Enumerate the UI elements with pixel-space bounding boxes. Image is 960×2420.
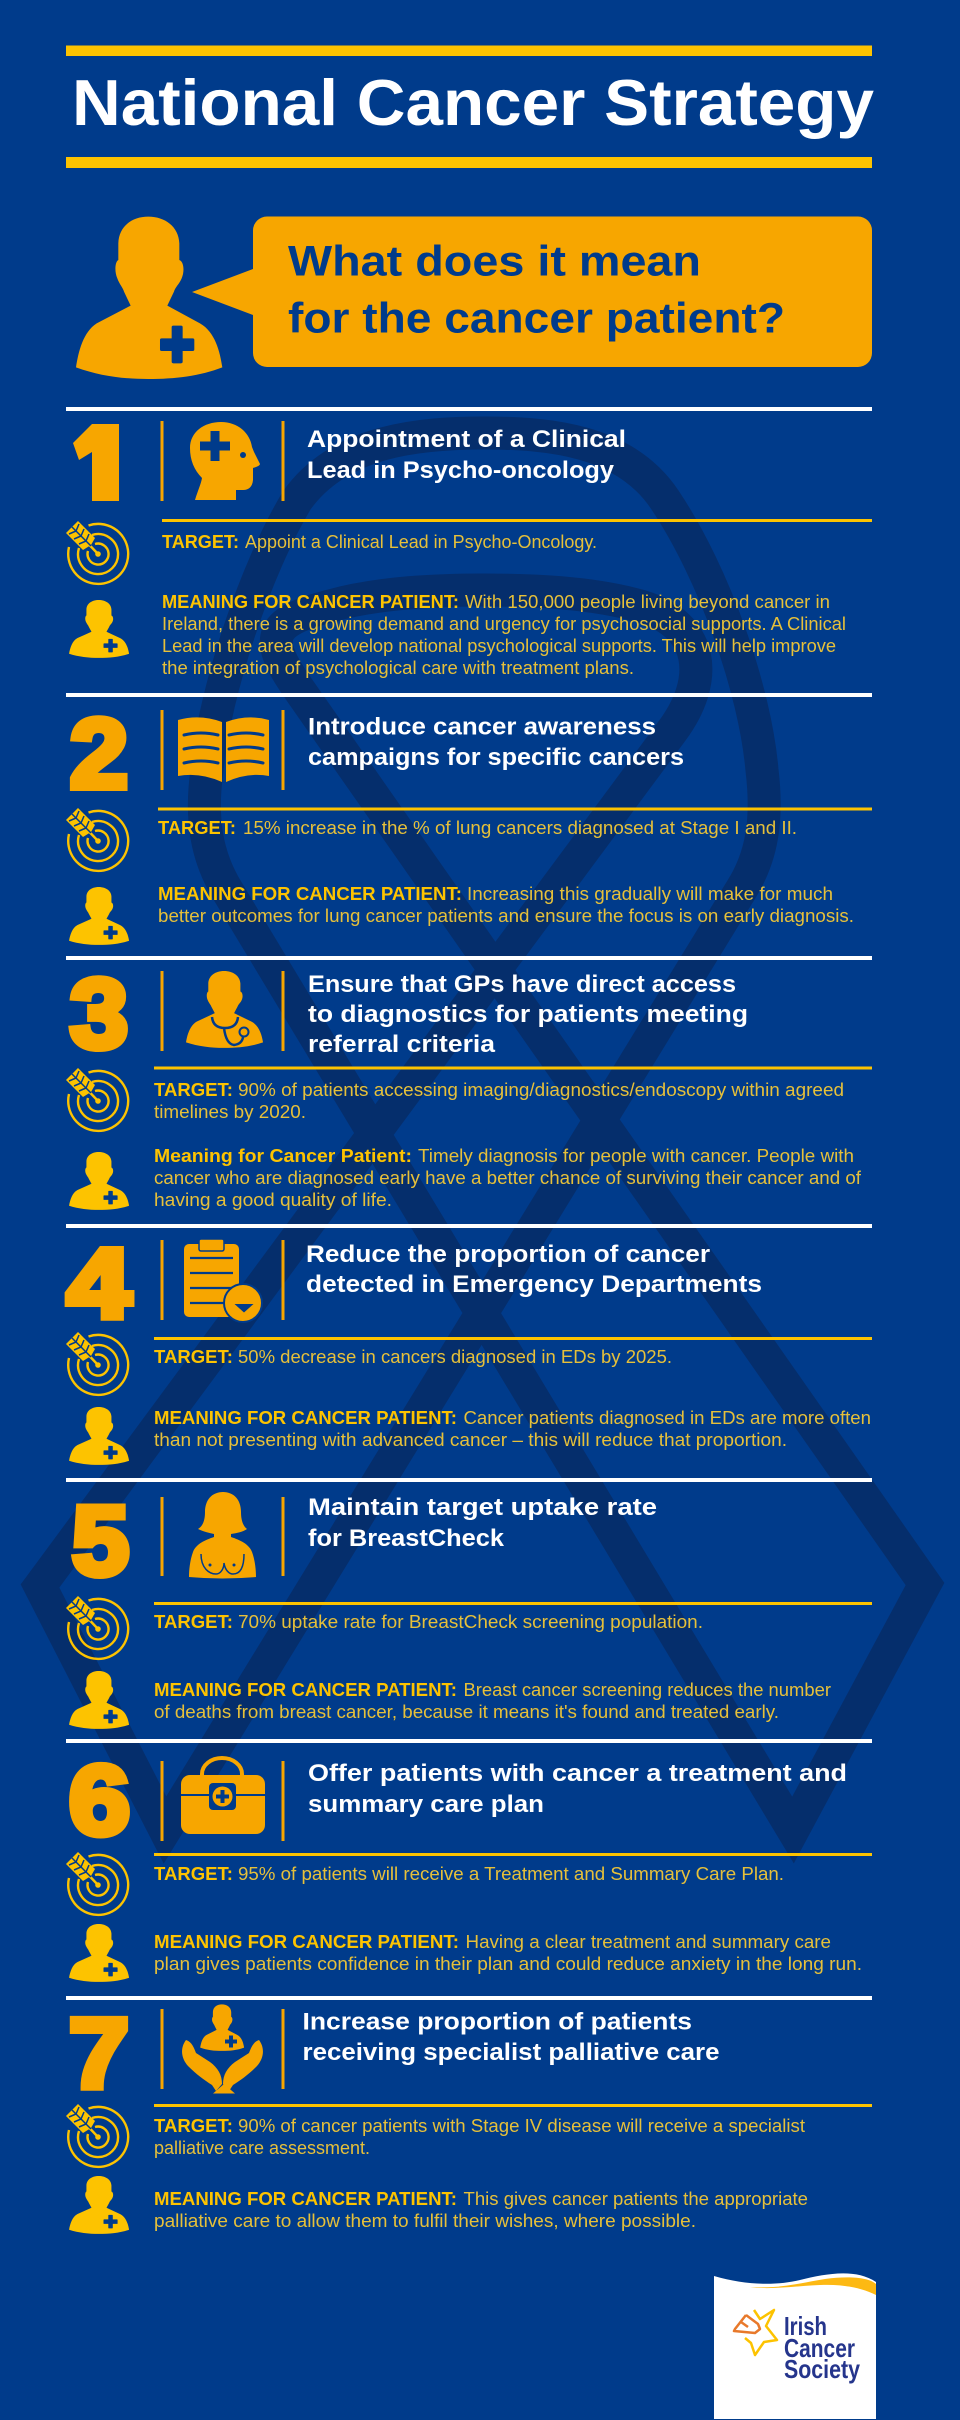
icon: target — [66, 521, 128, 584]
heading: Appointment of a Clinical — [307, 426, 626, 453]
meaning text — [154, 1408, 871, 1450]
icon: target — [66, 1596, 128, 1659]
target text — [154, 2116, 805, 2158]
heading: to diagnostics for patients meeting — [308, 1001, 748, 1028]
icon: target — [66, 1068, 128, 1131]
background awareness ribbon — [40, 433, 925, 1830]
meaning text — [162, 592, 846, 678]
heading — [308, 1494, 657, 1552]
meaning text: MEANING FOR CANCER PATIENT: — [154, 1408, 457, 1428]
meaning text: having a good quality of life. — [154, 1190, 392, 1210]
heading: campaigns for specific cancers — [308, 744, 684, 771]
heading: Increase proportion of patients — [302, 2008, 692, 2036]
meaning text: Timely diagnosis for people with cancer. People with — [418, 1146, 854, 1166]
meaning text: MEANING FOR CANCER PATIENT: — [154, 1680, 457, 1700]
title — [66, 46, 874, 168]
heading — [308, 714, 684, 771]
meaning text: MEANING FOR CANCER PATIENT: — [158, 884, 462, 904]
meaning text: Meaning for Cancer Patient: — [154, 1146, 412, 1166]
number 7: 7 — [69, 1998, 129, 2108]
icon: head with cross — [190, 422, 260, 500]
meaning text: better outcomes for lung cancer patients and ensure the focus is on early diagnosis. — [158, 906, 854, 926]
icon: patient small — [69, 2176, 129, 2234]
panel: item 3 — [66, 956, 872, 1210]
icon: patient — [76, 217, 222, 379]
target text: palliative care assessment. — [154, 2138, 370, 2158]
meaning text: Increasing this gradually will make for much — [467, 884, 833, 904]
icon: patient small — [69, 1152, 129, 1210]
meaning text: MEANING FOR CANCER PATIENT: — [162, 592, 459, 612]
meaning text: With 150,000 people living beyond cancer in — [465, 592, 830, 612]
heading: Offer patients with cancer a treatment and — [308, 1760, 847, 1787]
heading: Introduce cancer awareness — [308, 714, 656, 741]
target text: TARGET: — [154, 1347, 233, 1367]
icon: patient small — [69, 600, 129, 658]
heading: Lead in Psycho-oncology — [307, 457, 614, 484]
icon: target — [66, 2104, 128, 2167]
meaning text — [154, 1932, 862, 1974]
logo daffodil — [734, 2310, 777, 2355]
icon: hands holding patient — [182, 2004, 263, 2094]
logo wordmark: Cancer — [784, 2333, 855, 2363]
meaning text: palliative care to allow them to fulfil their wishes, where possible. — [154, 2211, 696, 2231]
meaning text: Breast cancer screening reduces the number — [464, 1680, 831, 1700]
icon: clipboard — [184, 1239, 262, 1322]
target text: Appoint a Clinical Lead in Psycho-Oncology. — [245, 532, 597, 552]
panel: item 6 — [66, 1739, 872, 1982]
panel: item 5 — [66, 1478, 872, 1729]
meaning text: This gives cancer patients the appropriate — [464, 2189, 808, 2209]
heading: Maintain target uptake rate — [308, 1494, 657, 1521]
logo: Irish Cancer Society — [714, 2273, 876, 2419]
panel: item 4 — [66, 1224, 872, 1465]
icon: patient small — [69, 1924, 129, 1982]
icon: book — [178, 717, 269, 782]
number 1 — [73, 424, 119, 501]
target text: 70% uptake rate for BreastCheck screening population. — [238, 1612, 703, 1632]
meaning text: the integration of psychological care with treatment plans. — [162, 658, 634, 678]
heading — [307, 426, 626, 484]
target text: TARGET: — [162, 532, 239, 552]
meaning text: Having a clear treatment and summary care — [466, 1932, 831, 1952]
speech bubble: What does it mean — [288, 238, 701, 286]
heading: summary care plan — [308, 1791, 544, 1818]
heading: receiving specialist palliative care — [302, 2039, 720, 2066]
target text: 15% increase in the % of lung cancers diagnosed at Stage I and II. — [243, 818, 797, 838]
target text: 90% of patients accessing imaging/diagnostics/endoscopy within agreed — [238, 1080, 844, 1100]
icon: target — [66, 808, 128, 871]
icon: medical bag — [181, 1758, 265, 1834]
panel: item 2 — [66, 693, 872, 945]
target text: TARGET: — [154, 1612, 233, 1632]
target text: TARGET: — [158, 818, 236, 838]
icon: doctor with stethoscope — [186, 971, 263, 1048]
meaning text: MEANING FOR CANCER PATIENT: — [154, 2189, 457, 2209]
icon: patient small — [69, 1671, 129, 1729]
icon: woman — [189, 1492, 256, 1578]
meaning text — [154, 2189, 808, 2231]
heading: Ensure that GPs have direct access — [308, 971, 736, 998]
target text — [154, 1080, 844, 1122]
heading: for BreastCheck — [308, 1525, 504, 1552]
meaning text: Cancer patients diagnosed in EDs are more often — [464, 1408, 871, 1428]
number 6: 6 — [69, 1745, 130, 1855]
number 3: 3 — [70, 958, 128, 1068]
meaning text: than not presenting with advanced cancer – this will reduce that proportion. — [154, 1430, 787, 1450]
target text: 95% of patients will receive a Treatment and Summary Care Plan. — [238, 1864, 784, 1884]
number 4: 4 — [67, 1228, 131, 1338]
icon: target — [66, 1332, 128, 1395]
heading — [306, 1241, 762, 1298]
heading: referral criteria — [308, 1031, 495, 1058]
meaning text: Lead in the area will develop national psychological supports. This will help improve — [162, 636, 836, 656]
heading — [302, 2008, 720, 2066]
target text: 50% decrease in cancers diagnosed in EDs by 2025. — [238, 1347, 672, 1367]
icon: target — [66, 1852, 128, 1915]
icon: patient small — [69, 1407, 129, 1465]
meaning text — [154, 1680, 831, 1722]
heading: detected in Emergency Departments — [306, 1271, 762, 1298]
heading — [308, 971, 748, 1058]
meaning text: MEANING FOR CANCER PATIENT: — [154, 1932, 459, 1952]
target text: TARGET: — [154, 1864, 233, 1884]
target text: TARGET: — [154, 1080, 233, 1100]
heading — [308, 1760, 847, 1818]
logo wordmark: Irish — [784, 2311, 827, 2341]
meaning text: plan gives patients confidence in their plan and could reduce anxiety in the long run. — [154, 1954, 862, 1974]
panel: item 1 — [66, 407, 872, 678]
meaning text — [154, 1146, 862, 1210]
meaning text: of deaths from breast cancer, because it means it's found and treated early. — [154, 1702, 779, 1722]
target text: 90% of cancer patients with Stage IV disease will receive a specialist — [238, 2116, 805, 2136]
heading: Reduce the proportion of cancer — [306, 1241, 710, 1268]
meaning text — [158, 884, 854, 926]
number 5: 5 — [72, 1486, 129, 1596]
meaning text: Ireland, there is a growing demand and urgency for psychosocial supports. A Clinical — [162, 614, 846, 634]
panel: item 7 — [66, 1996, 872, 2234]
icon: patient small — [69, 887, 129, 945]
logo wordmark: Society — [784, 2354, 860, 2384]
number 1: 1 — [70, 408, 128, 518]
title: National Cancer Strategy — [72, 66, 874, 139]
speech bubble: for the cancer patient? — [288, 295, 785, 343]
logo wordmark — [784, 2311, 860, 2384]
number 2: 2 — [70, 698, 128, 808]
target text: TARGET: — [154, 2116, 233, 2136]
speech bubble — [192, 216, 872, 367]
meaning text: cancer who are diagnosed early have a better chance of surviving their cancer and of — [154, 1168, 862, 1188]
target text: timelines by 2020. — [154, 1102, 306, 1122]
